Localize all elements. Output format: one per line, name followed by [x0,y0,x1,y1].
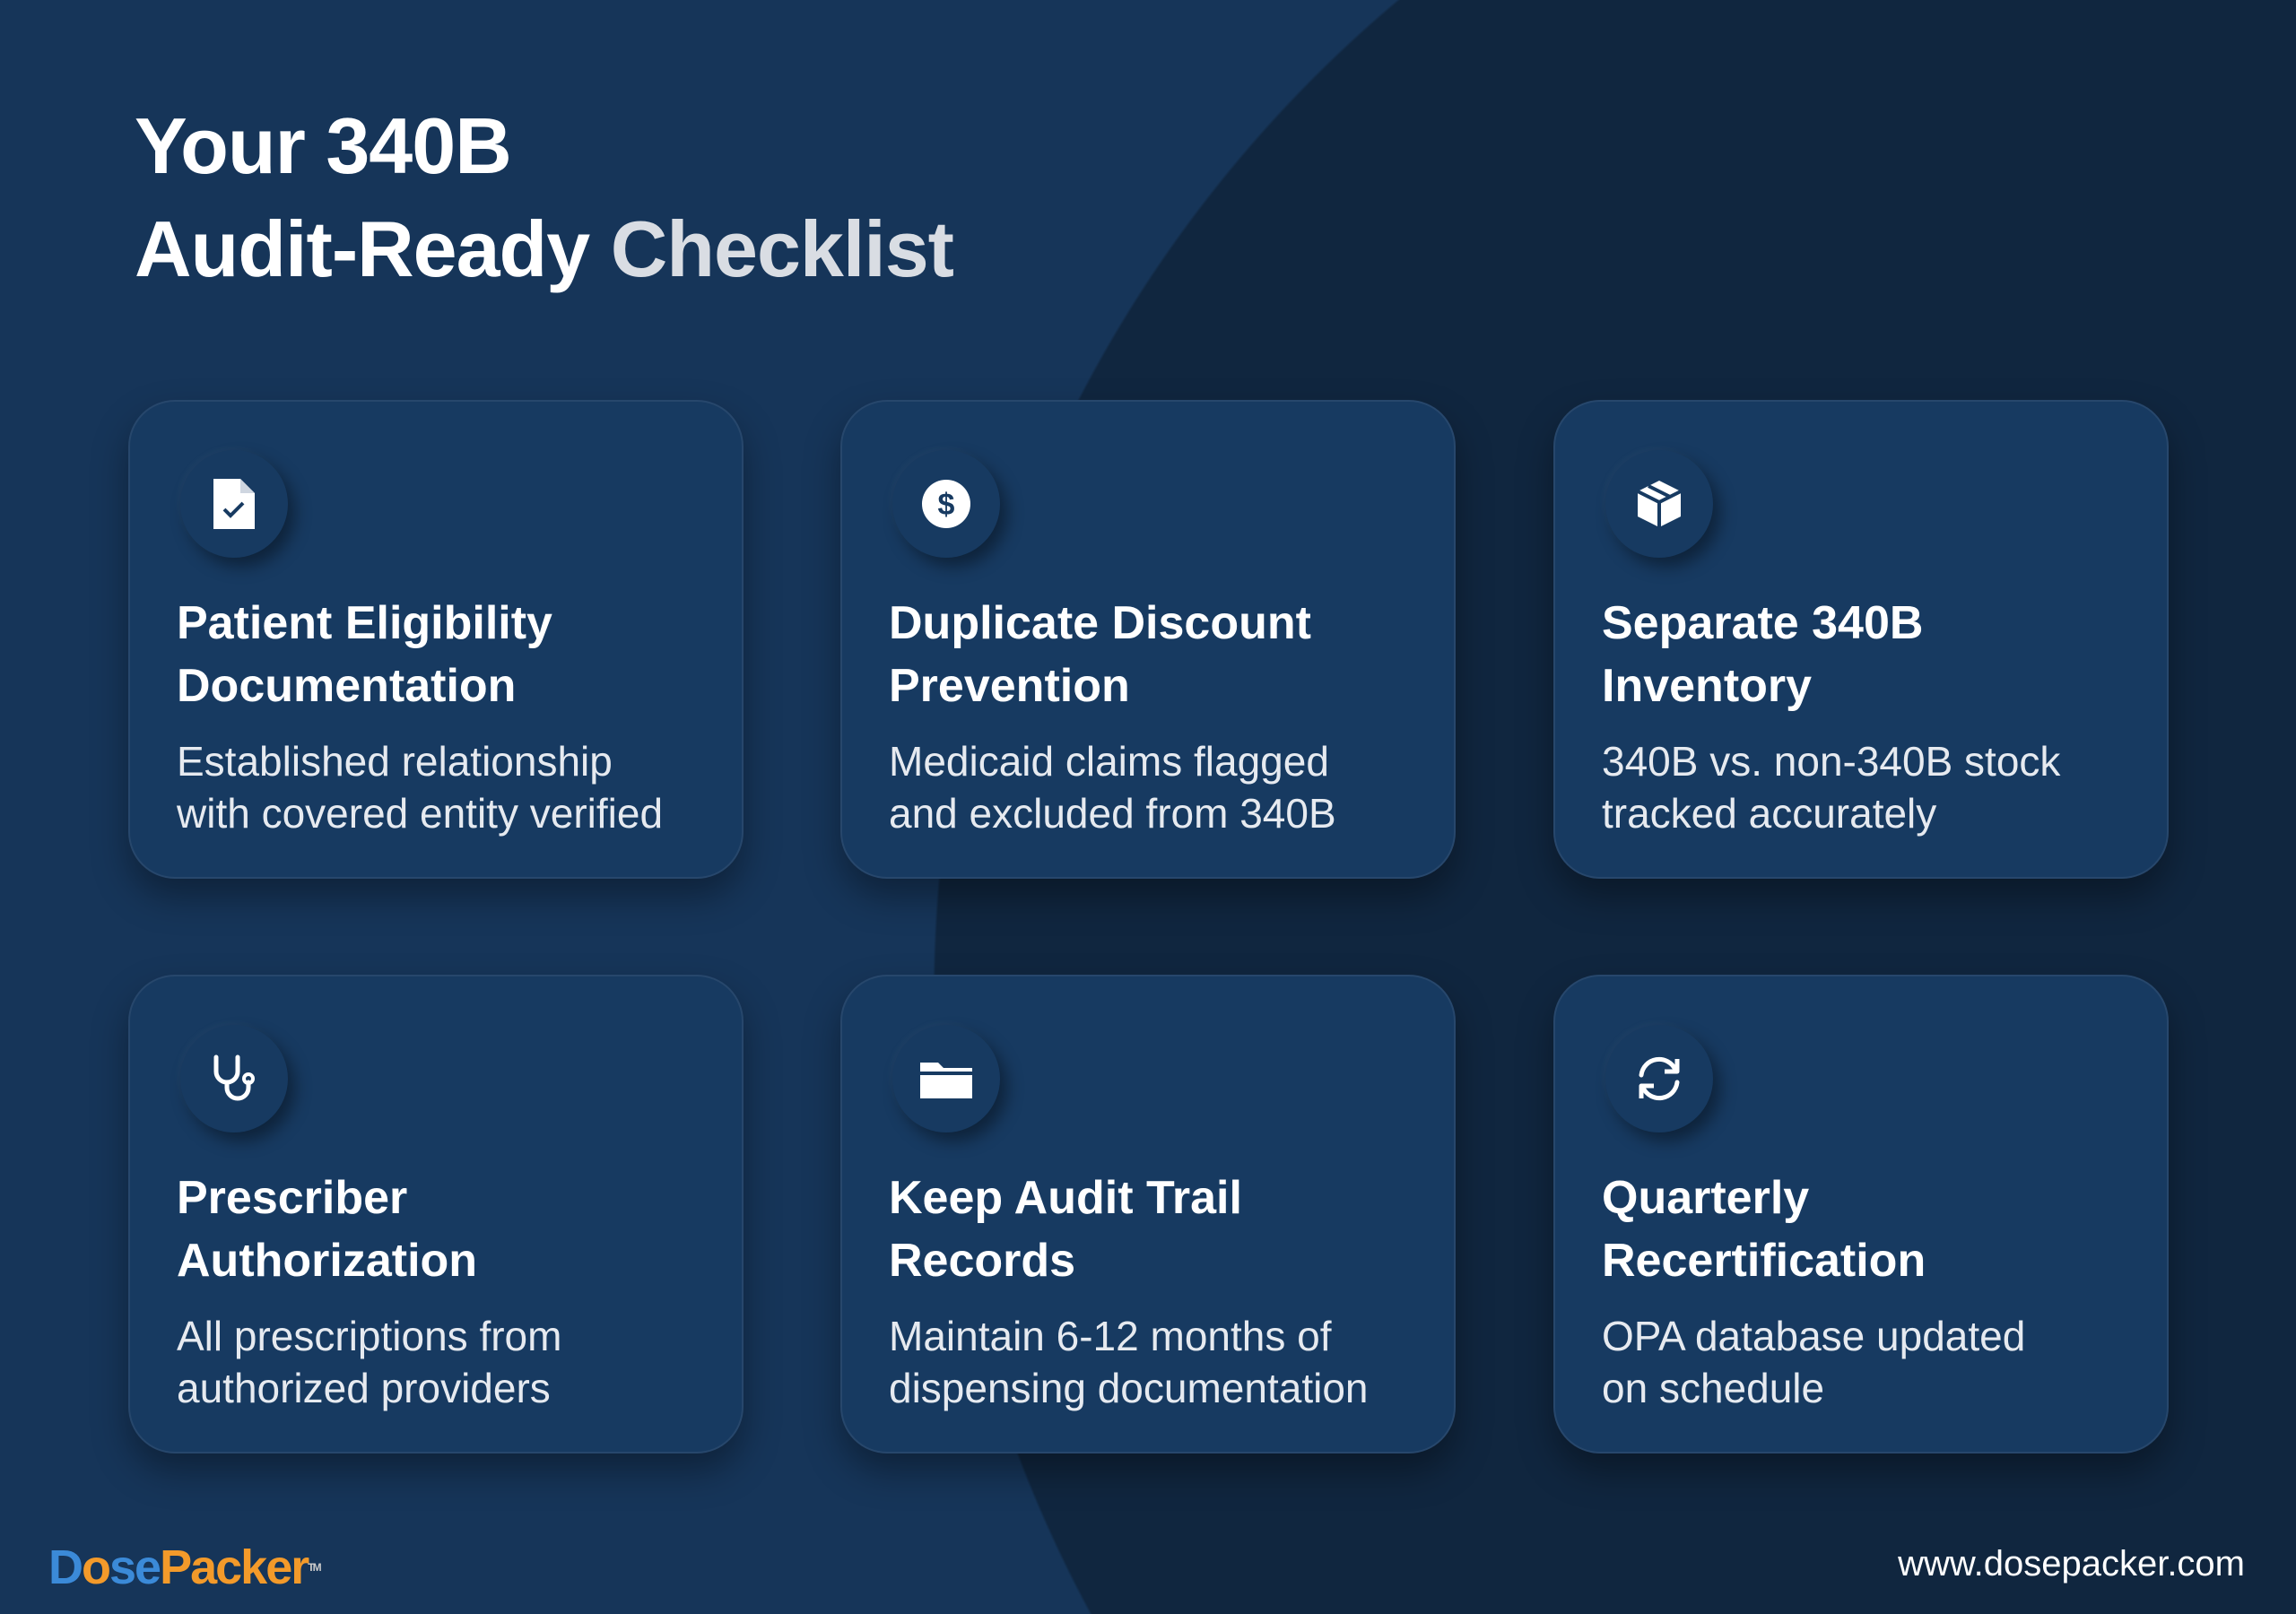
heading: Recertification [1602,1235,1926,1287]
panel: patient eligibility [128,400,744,879]
text: All prescriptions from [177,1313,561,1359]
text: OPA database updated [1602,1313,2025,1359]
heading [889,1172,1242,1287]
heading [1602,597,1923,712]
text: on schedule [1602,1365,1824,1411]
text: 340B vs. non-340B stock [1602,738,2060,785]
heading: Duplicate Discount [889,597,1311,649]
text: Established relationship [177,738,613,785]
text: Medicaid claims flagged [889,738,1329,785]
panel: separate inventory [1553,400,2169,879]
website url: www.dosepacker.com [1898,1544,2245,1584]
heading: Prevention [889,660,1130,712]
icon: stethoscope [180,1025,288,1132]
heading [177,597,552,712]
heading: Records [889,1235,1075,1287]
heading: Authorization [177,1235,477,1287]
heading: Prescriber [177,1172,407,1224]
text: Maintain 6-12 months of [889,1313,1331,1359]
heading [1602,1172,1926,1287]
text: with covered entity verified [177,790,663,837]
text [176,738,663,837]
heading: Separate 340B [1602,597,1923,649]
icon: folder [892,1025,1000,1132]
heading: Patient Eligibility [177,597,552,649]
heading: Quarterly [1602,1172,1809,1224]
icon: dollar: $ [938,488,955,522]
text: tracked accurately [1602,790,1936,837]
heading [889,597,1311,712]
icon: box [1605,450,1713,558]
text [889,738,1336,837]
heading: Inventory [1602,660,1812,712]
text: dispensing documentation [889,1365,1368,1411]
text: authorized providers [177,1365,551,1411]
text [1602,738,2061,837]
icon: refresh [1605,1025,1713,1132]
text [889,1313,1368,1411]
panel: audit trail [840,975,1456,1453]
icon: document check [180,450,288,558]
logo: DosePackerTM [48,1540,320,1594]
heading [177,1172,477,1287]
icon: dollar [892,450,1000,558]
panel: prescriber authorization [128,975,744,1453]
heading: Keep Audit Trail [889,1172,1242,1224]
panel: duplicate discount [840,400,1456,879]
title: Your 340B [135,101,511,190]
heading: Documentation [177,660,516,712]
title [135,101,953,293]
text [177,1313,561,1411]
text: and excluded from 340B [889,790,1336,837]
panel: quarterly recertification [1553,975,2169,1453]
text [1602,1313,2025,1411]
title: Audit-Ready Checklist [135,204,953,293]
